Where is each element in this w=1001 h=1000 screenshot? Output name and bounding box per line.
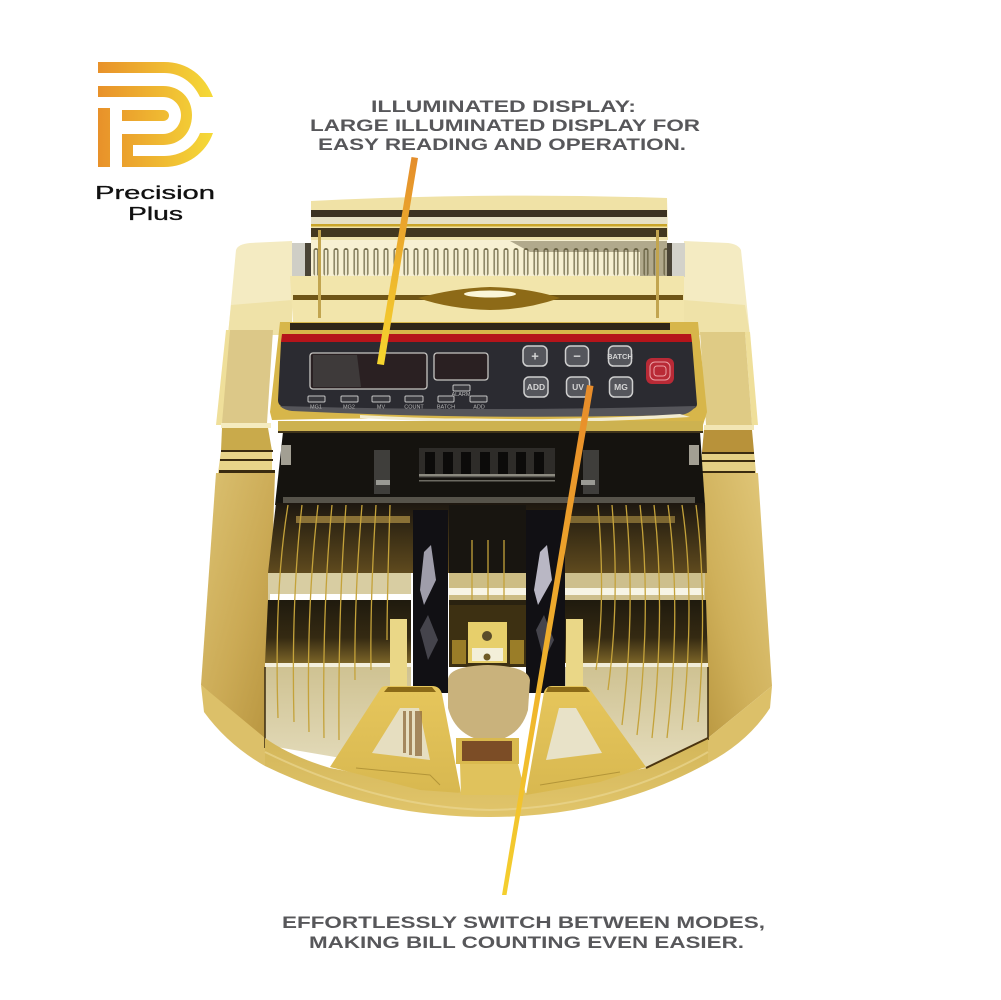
indicator labels: MV xyxy=(377,404,385,410)
caption: mode switching: EFFORTLESSLY SWITCH BETWEEN MODES, xyxy=(282,914,765,932)
logo wordmark: Plus xyxy=(128,204,183,224)
machine: front lip xyxy=(265,738,708,817)
indicator labels: BATCH xyxy=(437,404,455,410)
machine: counting mechanism xyxy=(275,421,705,505)
centre bracket xyxy=(449,605,526,667)
machine: centre plate xyxy=(448,665,530,795)
callout line: illuminated display xyxy=(377,157,418,365)
indicator labels: COUNT xyxy=(404,404,424,410)
caption: illuminated display: LARGE ILLUMINATED DISPLAY FOR xyxy=(310,117,700,135)
guide posts xyxy=(390,619,583,687)
buttons: BATCH xyxy=(607,352,633,361)
caption: illuminated display: EASY READING AND OPERATION. xyxy=(318,136,686,154)
buttons: − xyxy=(573,348,581,364)
machine: top bill hopper xyxy=(290,196,685,323)
buttons xyxy=(523,346,633,397)
machine: rear shoulders xyxy=(228,241,750,335)
machine: control panel xyxy=(270,322,707,425)
machine: left side panel xyxy=(201,330,275,766)
hopper centre emblem xyxy=(418,287,560,310)
buttons: ADD xyxy=(527,382,545,392)
bill counter machine xyxy=(201,196,772,817)
indicator labels: MG2 xyxy=(343,404,355,410)
callout line: mode switching xyxy=(502,385,594,895)
caption: mode switching xyxy=(282,914,765,952)
indicator labels: ALARM xyxy=(452,392,471,398)
indicator lights xyxy=(308,385,487,402)
buttons: MG xyxy=(614,382,628,392)
buttons: UV xyxy=(572,382,584,392)
machine: right side panel xyxy=(700,332,772,763)
machine: left foot xyxy=(330,686,461,793)
indicator labels: MG1 xyxy=(310,404,322,410)
sensor comb xyxy=(281,445,699,494)
curved guide fins xyxy=(277,505,703,740)
display: main counter xyxy=(310,353,427,389)
machine: right foot xyxy=(526,686,646,795)
display: batch counter xyxy=(434,353,488,380)
logo: Precision Plus xyxy=(95,62,215,224)
machine: drums and tray xyxy=(265,503,708,770)
caption: illuminated display xyxy=(310,98,700,154)
buttons: + xyxy=(531,348,539,364)
logo wordmark: Precision xyxy=(95,183,215,203)
logo wordmark xyxy=(95,183,215,224)
brand seal xyxy=(646,358,674,384)
hopper side chrome xyxy=(292,243,311,277)
indicator labels: ADD xyxy=(473,404,485,410)
logo mark: PD monogram xyxy=(98,62,213,167)
indicator labels xyxy=(310,392,485,410)
black feed rollers xyxy=(413,510,565,693)
caption: illuminated display: ILLUMINATED DISPLAY: xyxy=(371,98,636,116)
caption: mode switching: MAKING BILL COUNTING EVEN EASIER. xyxy=(309,934,744,952)
